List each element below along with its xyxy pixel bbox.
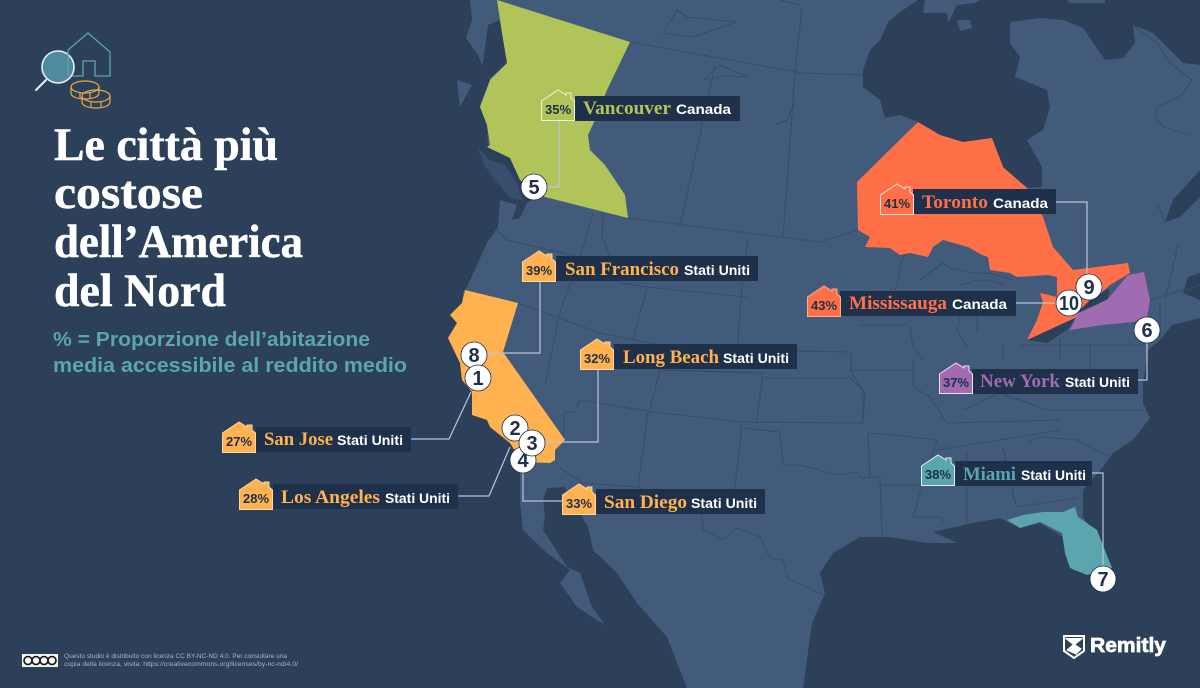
numbered city markers: 3 bbox=[526, 433, 538, 455]
label: San Diego 33%: Stati Uniti bbox=[691, 496, 757, 511]
label: Miami 38% bbox=[922, 455, 1092, 486]
title: dell’America bbox=[54, 216, 303, 268]
label: Los Angeles 28% bbox=[240, 479, 458, 510]
label: Mississauga 43%: 43% bbox=[811, 298, 837, 313]
label: Los Angeles 28%: Los Angeles bbox=[281, 487, 380, 508]
title: costose bbox=[54, 167, 203, 219]
licence note bbox=[64, 653, 298, 668]
label: Miami 38%: 38% bbox=[925, 467, 951, 482]
label: Vancouver 35% bbox=[542, 90, 740, 121]
region: New York state bbox=[1070, 272, 1150, 330]
numbered city markers: 9 bbox=[1083, 277, 1095, 299]
label: San Francisco 39%: 39% bbox=[526, 263, 552, 278]
island: Vancouver Island bbox=[478, 148, 522, 200]
numbered city markers: 1 bbox=[472, 368, 484, 390]
subtitle: media accessibile al reddito medio bbox=[53, 355, 407, 377]
label: San Diego 33% bbox=[562, 484, 765, 514]
logo: Remitly bbox=[1064, 635, 1167, 658]
label: Los Angeles 28%: 28% bbox=[243, 491, 269, 506]
label: New York 37%: 37% bbox=[943, 375, 969, 390]
label: Long Beach 32%: Stati Uniti bbox=[723, 351, 789, 366]
numbered city markers: 10 bbox=[1059, 293, 1079, 315]
label: San Jose 27%: 27% bbox=[226, 434, 252, 449]
label: San Diego 33%: San Diego bbox=[604, 492, 687, 513]
label: San Diego 33%: 33% bbox=[566, 496, 592, 511]
label: San Francisco 39%: San Francisco bbox=[565, 259, 679, 280]
logo: Remitly: Remitly bbox=[1090, 635, 1167, 657]
label: Los Angeles 28%: Stati Uniti bbox=[385, 491, 450, 506]
numbered city markers: 8 bbox=[468, 345, 480, 367]
label: Toronto 41%: 41% bbox=[884, 196, 910, 211]
label: Toronto 41%: Toronto bbox=[922, 192, 988, 213]
connector lines bbox=[411, 121, 1147, 570]
numbered city markers bbox=[461, 174, 1160, 592]
numbered city markers: 6 bbox=[1141, 320, 1153, 342]
label: San Francisco 39% bbox=[522, 251, 758, 282]
province and state borders bbox=[497, 0, 1200, 595]
numbered city markers: 2 bbox=[509, 418, 521, 440]
label: Mississauga 43% bbox=[808, 286, 1016, 316]
islands bbox=[457, 0, 1105, 107]
numbered city markers: 7 bbox=[1097, 569, 1109, 591]
licence note: copia della licenza, visita: https://creativecommons.org/licenses/by-nc-nd/4.0/ bbox=[64, 661, 298, 668]
map: North America bbox=[448, 0, 1200, 688]
label: Toronto 41% bbox=[880, 184, 1056, 214]
label: Long Beach 32%: Long Beach bbox=[623, 347, 719, 368]
label: Vancouver 35%: Vancouver bbox=[583, 98, 672, 119]
label: San Jose 27%: Stati Uniti bbox=[337, 433, 403, 448]
subtitle: % = Proporzione dell’abitazione bbox=[53, 329, 370, 351]
label: Miami 38%: Miami bbox=[963, 464, 1016, 485]
region: Ontario bbox=[857, 122, 1130, 340]
water: Lake Ontario bbox=[1077, 288, 1110, 313]
label: New York 37%: Stati Uniti bbox=[1065, 375, 1130, 390]
numbered city markers: 4 bbox=[517, 450, 529, 472]
label: Vancouver 35%: 35% bbox=[545, 102, 571, 117]
label: New York 37% bbox=[940, 363, 1138, 394]
label: Long Beach 32%: 32% bbox=[584, 351, 610, 366]
label: New York 37%: New York bbox=[980, 371, 1060, 392]
region: British Columbia bbox=[480, 0, 630, 218]
landmass bbox=[448, 0, 1200, 688]
subtitle bbox=[53, 329, 407, 377]
label: Mississauga 43%: Canada bbox=[952, 297, 1008, 312]
title bbox=[54, 119, 303, 317]
water: gulf, Nova Scotia side and lakes bbox=[482, 20, 1200, 343]
numbered city markers: 5 bbox=[528, 177, 540, 199]
label: Miami 38%: Stati Uniti bbox=[1021, 468, 1086, 483]
title: Le città più bbox=[54, 119, 278, 171]
label: Long Beach 32% bbox=[580, 339, 797, 370]
label: San Jose 27% bbox=[222, 422, 411, 452]
icon: house, magnifier and coins bbox=[36, 33, 110, 108]
region: California bbox=[448, 290, 565, 463]
label: Mississauga 43%: Mississauga bbox=[849, 293, 947, 314]
title: del Nord bbox=[54, 265, 226, 317]
label: San Francisco 39%: Stati Uniti bbox=[684, 263, 750, 278]
licence note: Questo studio è distribuito con licenza CC BY-NC-ND 4.0. Per consultare una bbox=[64, 653, 288, 660]
label: San Jose 27%: San Jose bbox=[264, 429, 333, 450]
label: Vancouver 35%: Canada bbox=[676, 102, 732, 117]
label: Toronto 41%: Canada bbox=[993, 196, 1049, 211]
region: Florida bbox=[1007, 507, 1112, 575]
licence badge bbox=[22, 654, 58, 667]
